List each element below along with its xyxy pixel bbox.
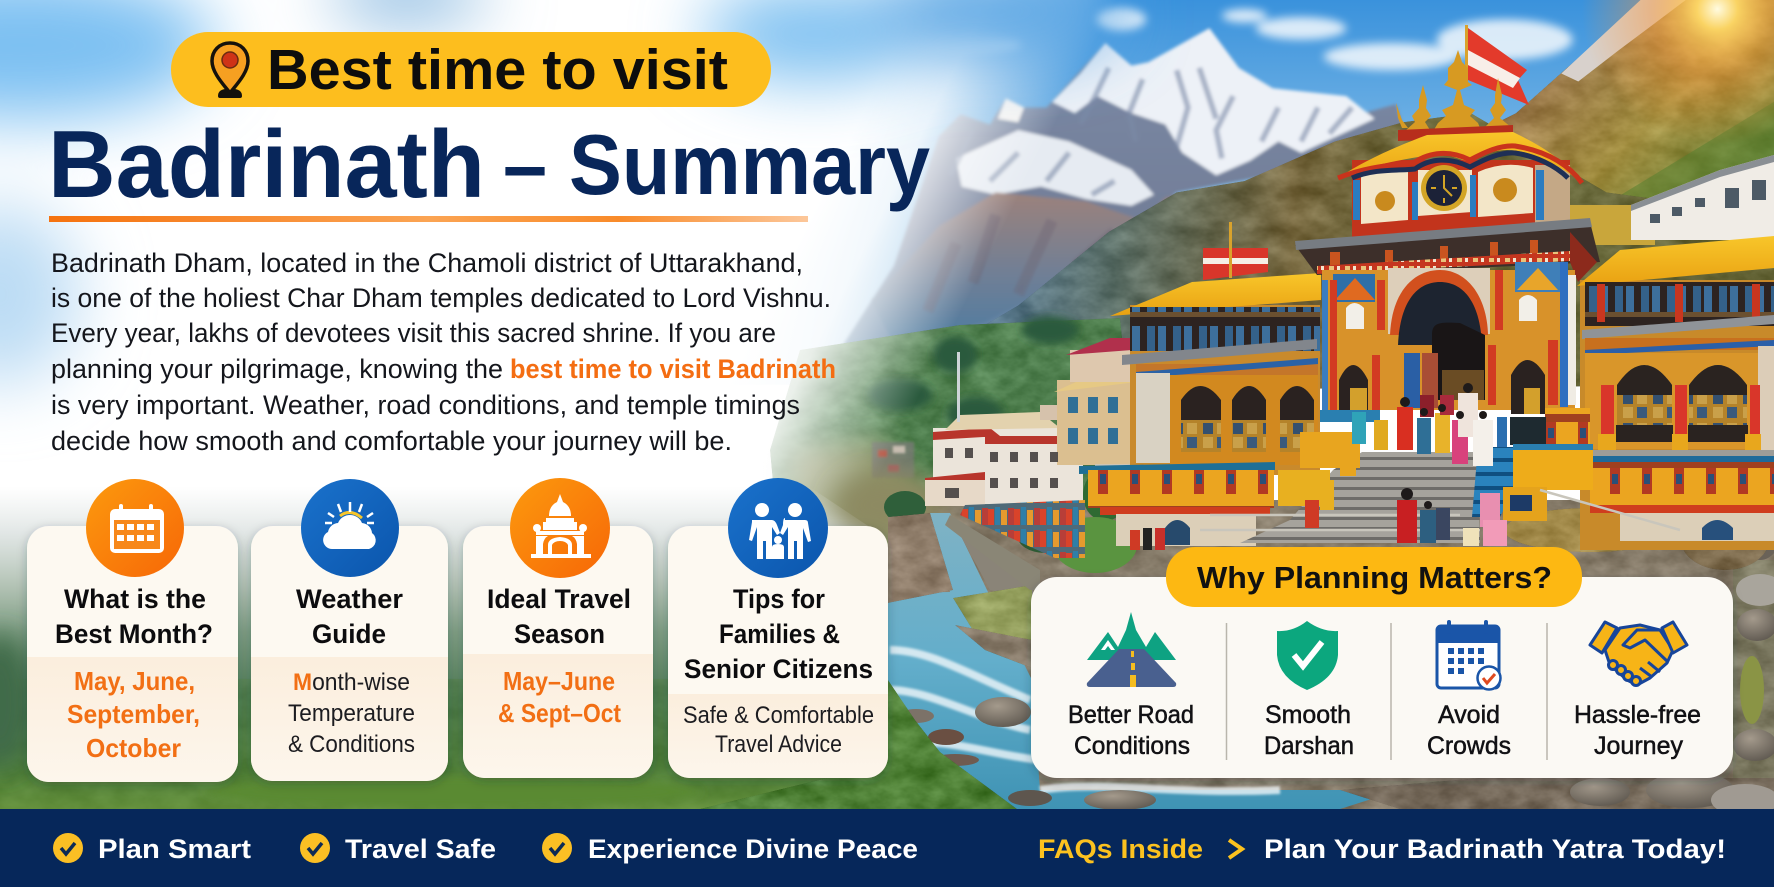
intro paragraph: [51, 248, 836, 456]
icon: sun and cloud: [301, 479, 399, 577]
item: Better Road Conditions: [1068, 612, 1194, 760]
card: What is the Best Month?: [27, 479, 238, 782]
distant scene: sky and Himalayan mountains: [0, 0, 1774, 390]
title: Badrinath – Summary: [48, 111, 930, 218]
town buildings: [925, 338, 1140, 590]
title underline: [49, 216, 808, 222]
lower terrain and river: [700, 469, 1774, 816]
header pill: Best time to visit: [171, 32, 771, 107]
item: Avoid Crowds: Avoid: [1438, 701, 1500, 729]
mist and foreground fade on the left: [0, 0, 1301, 810]
heading: [55, 584, 213, 649]
answer: May–June: [503, 666, 615, 696]
heading: What is the: [64, 584, 206, 614]
Plan your yatra call to action: Plan Your Badrinath Yatra Today!: [1264, 834, 1726, 864]
answer: [67, 666, 200, 763]
card: Weather Guide: [251, 479, 448, 781]
heading: Best Month?: [55, 619, 213, 649]
heading: Senior Citizens: [684, 654, 873, 684]
item: Smooth Darshan: [1264, 621, 1354, 760]
drum and panels: [1352, 160, 1570, 238]
flag: [1465, 25, 1529, 105]
item: Better Road Conditions: Conditions: [1074, 732, 1190, 760]
intro paragraph: is one of the holiest Char Dham temples dedicated to Lord Vishnu.: [51, 283, 831, 313]
crowd along the river wall: [960, 500, 1085, 558]
description: Travel Advice: [715, 731, 842, 758]
right hillside and sun: [1459, 0, 1774, 238]
heading pill: [1166, 547, 1582, 607]
heading: [684, 584, 873, 684]
description: & Conditions: [288, 731, 415, 758]
rapids: [890, 650, 1280, 791]
river: [888, 513, 1400, 809]
answer: September,: [67, 699, 200, 729]
river banks: [888, 500, 1774, 816]
item: Hassle-free Journey: [1574, 622, 1701, 760]
heading: [487, 584, 631, 649]
clouds: [890, 8, 1573, 70]
small flag on left wing: [1203, 222, 1268, 280]
title: Badrinath – Summary: – Summary: [503, 118, 930, 213]
heading: Season: [514, 619, 605, 649]
green valley slopes and small village: [770, 316, 1140, 560]
icon: location pin: [212, 43, 248, 98]
hillside blending above the river: [835, 473, 945, 537]
heading: Families &: [719, 619, 840, 649]
rocky ground: [888, 500, 1774, 809]
item: Better Road Conditions: Better Road: [1068, 701, 1194, 729]
description: [683, 702, 874, 758]
sky: [0, 0, 1774, 385]
arrow: [1229, 840, 1242, 858]
heading: Weather: [296, 584, 403, 614]
check: Plan Smart: Plan Smart: [98, 834, 251, 864]
panel: Why Planning Matters: [1031, 547, 1733, 778]
card: Tips for Families & Senior Citizens: [668, 478, 888, 778]
bushes and trees around the temple base: [1017, 469, 1769, 573]
heading pill: Why Planning Matters?: [1197, 560, 1552, 595]
answer: October: [86, 733, 181, 763]
heading: Guide: [312, 619, 386, 649]
header pill: Best time to visit: Best time to visit: [267, 38, 728, 102]
intro paragraph: is very important. Weather, road conditions, and temple timings: [51, 390, 800, 420]
valley tree: [884, 491, 926, 523]
check: Experience Divine Peace: Experience Divine Peace: [588, 834, 918, 864]
heading: [296, 584, 403, 649]
white hotel buildings: [1631, 155, 1774, 240]
description: Safe & Comfortable: [683, 702, 874, 729]
intro paragraph: decide how smooth and comfortable your journey will be.: [51, 426, 732, 456]
golden dome: [1338, 132, 1582, 183]
icon: temple: [510, 478, 610, 578]
heading: Ideal Travel: [487, 584, 631, 614]
description: [288, 669, 415, 758]
white haze: [0, 0, 1301, 554]
intro paragraph: Every year, lakhs of devotees visit this sacred shrine. If you are: [51, 318, 776, 348]
intro paragraph: Badrinath Dham, located in the Chamoli district of Uttarakhand,: [51, 248, 803, 278]
heading: Tips for: [733, 584, 825, 614]
check: Plan Smart: [53, 833, 251, 864]
item: Smooth Darshan: Darshan: [1264, 732, 1354, 760]
forested ridge: [950, 113, 1774, 390]
item: Hassle-free Journey: Hassle-free: [1574, 701, 1701, 729]
temple: left wing: [1079, 222, 1321, 546]
temple: central tower: [1295, 25, 1600, 450]
description: Month-wise: [293, 669, 410, 696]
description: Temperature: [288, 700, 415, 727]
bottom banner: [0, 809, 1774, 887]
item: Avoid Crowds: [1427, 620, 1511, 760]
item: Avoid Crowds: Crowds: [1427, 732, 1511, 760]
carved band: [1295, 218, 1600, 282]
golden finials: [1396, 50, 1512, 133]
item: Smooth Darshan: Smooth: [1265, 701, 1351, 729]
pale blue sky patches: [0, 0, 1120, 385]
icon: calendar: [86, 479, 184, 577]
card: Ideal Travel Season: [463, 478, 653, 778]
foreground hillside greenery: [700, 680, 1017, 809]
green forest fading upward into mist: [0, 475, 1013, 810]
intro paragraph: best time to visit Badrinath: [510, 354, 836, 384]
icon: family: [728, 478, 828, 578]
answer: & Sept–Oct: [498, 698, 621, 728]
answer: May, June,: [74, 666, 195, 696]
answer: [498, 666, 621, 728]
title: Badrinath – Summary: Badrinath: [48, 111, 485, 218]
temple stairs: [1200, 432, 1680, 543]
FAQs Inside call to action: FAQs Inside: [1038, 834, 1203, 864]
pilgrims: [1130, 383, 1532, 550]
check: Travel Safe: Travel Safe: [345, 834, 496, 864]
intro paragraph: planning your pilgrimage, knowing the: [51, 354, 503, 384]
item: Hassle-free Journey: Journey: [1594, 732, 1683, 760]
temple: right wing: [1570, 155, 1774, 550]
snow mountains: [843, 28, 1403, 356]
painted gate wall: [1320, 262, 1590, 450]
